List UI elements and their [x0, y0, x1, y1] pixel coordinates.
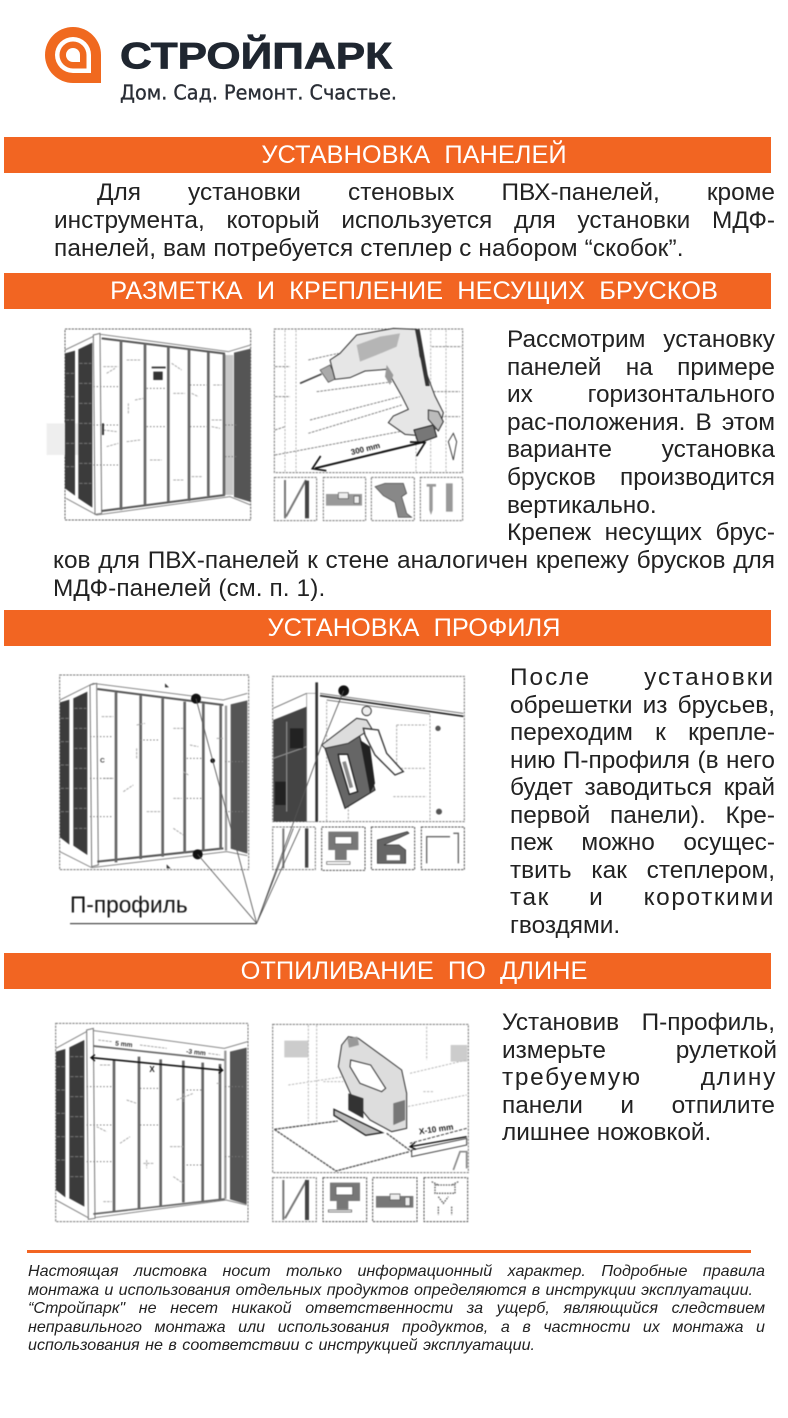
text block: profile column: первой панели). Кре- — [510, 802, 775, 828]
disclaimer: монтажа и использования отдельных продуктов определяются в инструкции эксплуатации. — [28, 1280, 753, 1298]
text block: profile column: После установки — [510, 664, 775, 691]
text block: rasmetka column: рас-положения. В этом — [507, 408, 775, 436]
room: C — [100, 757, 105, 764]
heading: разметка: РАЗМЕТКА И КРЕПЛЕНИЕ НЕСУЩИХ БРУСКОВ — [110, 277, 718, 305]
text block: intro: панелей, вам потребуется степлер с набором “скобок”. — [54, 235, 684, 262]
heading: установка панелей — [4, 137, 771, 173]
heading: установка панелей: УСТАВНОВКА ПАНЕЛЕЙ — [261, 141, 567, 169]
text block: profile column: обрешетки из брусьев, — [510, 692, 775, 718]
text block: intro — [54, 179, 775, 262]
brand name: СТРОЙПАРК — [120, 34, 392, 76]
text block: cutting column: требуемую длину — [502, 1064, 777, 1091]
heading: разметка — [4, 273, 771, 309]
text block: cutting column — [502, 1009, 777, 1146]
text block: intro: Для установки стеновых ПВХ-панелей, кроме — [97, 179, 775, 206]
text block: profile column: твить как степлером, — [510, 856, 775, 884]
text block: intro: инструмента, который используется для установки МДФ- — [54, 207, 775, 234]
text block: profile column: пеж можно осущес- — [510, 829, 775, 856]
logo — [45, 27, 397, 104]
text block: rasmetka column: панелей на примере — [507, 354, 775, 380]
text block: cutting column: панели и отпилите — [502, 1092, 775, 1118]
footer rule — [27, 1250, 751, 1253]
heading: установка профиля: УСТАНОВКА ПРОФИЛЯ — [267, 614, 560, 642]
stapler panel — [273, 676, 464, 822]
illustration: profile mounting — [58, 674, 466, 925]
text block: rasmetka full width: ков для ПВХ-панелей к стене аналогичен крепежу брусков для — [53, 547, 775, 574]
room — [60, 675, 249, 870]
text block: rasmetka column: Рассмотрим установку — [507, 326, 775, 353]
text block: rasmetka full width: МДФ-панелей (см. п. 1). — [53, 574, 325, 602]
text block: rasmetka column: вертикально. — [507, 492, 657, 518]
text block: rasmetka column — [507, 326, 775, 546]
heading: отпиливание: ОТПИЛИВАНИЕ ПО ДЛИНЕ — [241, 957, 587, 985]
text block: cutting column: лишнее ножовкой. — [502, 1119, 711, 1146]
disclaimer — [28, 1262, 765, 1354]
drill panel — [274, 328, 463, 473]
tool icons — [273, 827, 464, 870]
illustration: room frame with battens — [46, 327, 464, 522]
disclaimer: “Стройпарк" не несет никакой ответственности за ущерб, являющийся следствием — [28, 1299, 765, 1317]
tagline: Дом. Сад. Ремонт. Счастье. — [120, 80, 397, 104]
tool icons — [274, 477, 463, 521]
callout: П-профиль — [70, 691, 344, 924]
tool icons — [273, 1178, 468, 1222]
text block: profile column: переходим к крепле- — [510, 719, 775, 746]
disclaimer: использования не в соответствии с инструкцией эксплуатации. — [28, 1336, 535, 1354]
jigsaw panel — [273, 1024, 468, 1173]
text block: profile column: нию П-профиля (в него — [510, 746, 775, 774]
room — [56, 1023, 248, 1222]
jigsaw panel: X-10 mm — [418, 1122, 454, 1136]
text block: profile column: так и короткими — [510, 884, 775, 911]
text block: rasmetka column: брусков производится — [507, 464, 775, 491]
text block: rasmetka column: их горизонтального — [507, 381, 775, 408]
room: X — [149, 1065, 155, 1074]
text block: cutting column: Установив П-профиль, — [502, 1009, 775, 1036]
room: 5 mm — [115, 1040, 133, 1049]
disclaimer: неправильного монтажа или использования продуктов, а в частности их монтажа и — [28, 1318, 765, 1336]
text block: profile column: гвоздями. — [510, 912, 620, 938]
room: -3 mm — [186, 1048, 206, 1057]
text block: rasmetka column: варианте установка — [507, 436, 775, 463]
text block: rasmetka full width — [53, 547, 775, 602]
text block: cutting column: измерьте рулеткой — [502, 1037, 777, 1064]
drill panel: 300 mm — [350, 441, 381, 457]
disclaimer: Настоящая листовка носит только информационный характер. Подробные правила — [28, 1262, 765, 1280]
room — [47, 329, 251, 520]
text block: profile column: будет заводиться край — [510, 774, 775, 801]
icon: orange location ring — [45, 27, 101, 83]
heading: установка профиля — [4, 610, 771, 646]
text block: profile column — [510, 664, 775, 938]
text block: rasmetka column: Крепеж несущих брус- — [507, 519, 775, 546]
callout: П-профиль: П-профиль — [70, 892, 188, 918]
heading: отпиливание — [4, 953, 771, 989]
illustration: cutting to length — [54, 1022, 470, 1223]
